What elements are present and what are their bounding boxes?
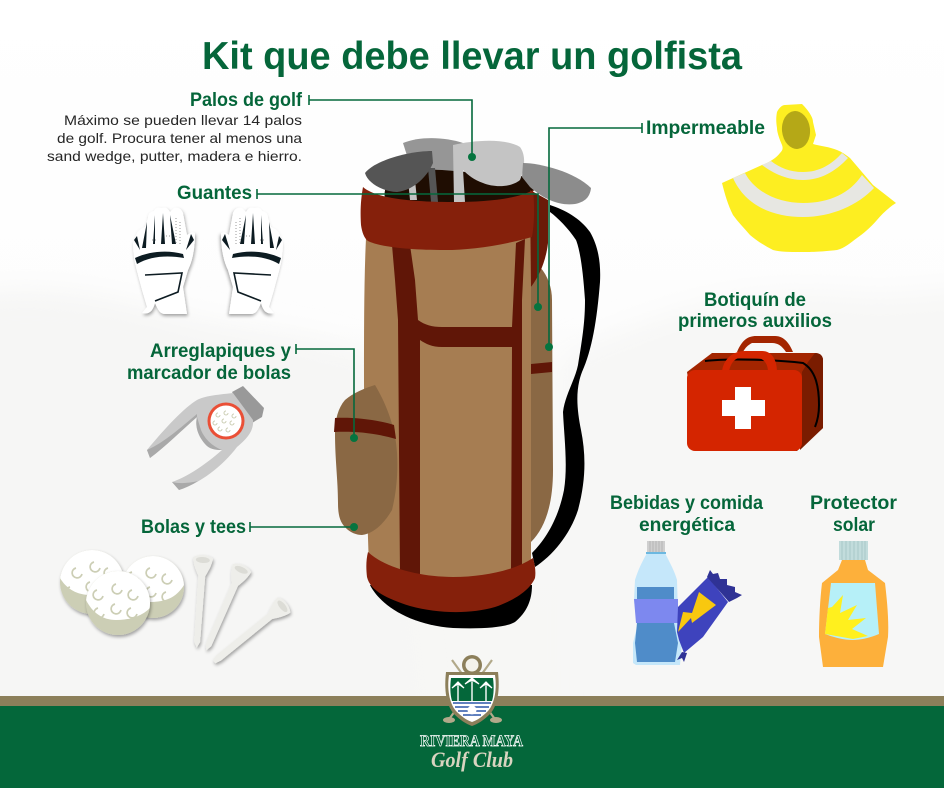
heading: bebidas: Bebidas y comida (610, 493, 763, 514)
icon: divot tool and ball marker (147, 386, 264, 490)
logo wordmark: RIVIERA MAYA (420, 733, 523, 750)
icon: raincoat (722, 104, 896, 252)
connector: arreglapiques (296, 344, 358, 442)
connector: guantes (257, 189, 542, 311)
text: palos de golf: de golf. Procura tener al menos una (57, 130, 302, 146)
crossed clubs (447, 660, 497, 722)
connector: impermeable (545, 123, 642, 351)
icon: first aid kit (687, 336, 823, 451)
top rim (361, 187, 534, 250)
ball back left (58, 548, 126, 616)
heading: botiquín (678, 290, 832, 332)
title: Kit que debe llevar un golfista (202, 35, 742, 78)
icon: gloves (133, 207, 283, 314)
icon: sunscreen (819, 541, 888, 667)
text: palos de golf (47, 90, 303, 164)
heading: bolas y tees: Bolas y tees (141, 517, 246, 538)
heading: guantes: Guantes (177, 183, 252, 204)
right pocket (531, 267, 553, 542)
icon: golf balls (58, 548, 186, 638)
bottom base (370, 585, 532, 628)
ball back right (120, 554, 186, 620)
heading: bebidas (610, 493, 763, 536)
heading: impermeable: Impermeable (646, 118, 765, 139)
icon: energy bar (677, 570, 742, 662)
rim side (530, 190, 548, 287)
connector: bolas (250, 522, 358, 532)
bag body (364, 236, 531, 585)
heading: arreglapiques: Arreglapiques y (150, 341, 291, 362)
connector: palos de golf (309, 95, 476, 161)
heading: arreglapiques: marcador de bolas (127, 363, 291, 384)
left glove (133, 207, 195, 314)
text: palos de golf: Máximo se pueden llevar 14 palos (64, 112, 302, 128)
heading: arreglapiques (127, 341, 291, 384)
logo: Riviera Maya Golf Club (420, 655, 523, 772)
heading: protector solar: Protector (810, 493, 898, 514)
shield (445, 672, 499, 726)
icon: water bottle (633, 541, 682, 665)
icon: tees (187, 554, 293, 669)
footer band (0, 696, 944, 788)
palms (458, 682, 486, 701)
heading: protector solar (810, 493, 898, 536)
text: palos de golf: sand wedge, putter, madera e hierro. (47, 148, 302, 164)
heading: protector solar: solar (833, 515, 876, 536)
sun (462, 655, 482, 675)
heading: bebidas: energética (639, 515, 735, 536)
logo script: Golf Club (431, 747, 513, 772)
golf bag (334, 138, 600, 628)
right glove (221, 207, 283, 314)
shoulder strap (532, 205, 600, 567)
heading: botiquín: Botiquín de (704, 290, 806, 311)
text: palos de golf: Palos de golf (190, 90, 303, 111)
ball front (84, 570, 152, 638)
left pocket (335, 385, 397, 535)
heading: botiquín: primeros auxilios (678, 311, 832, 332)
clubs (365, 138, 591, 205)
bag straps (392, 239, 525, 576)
